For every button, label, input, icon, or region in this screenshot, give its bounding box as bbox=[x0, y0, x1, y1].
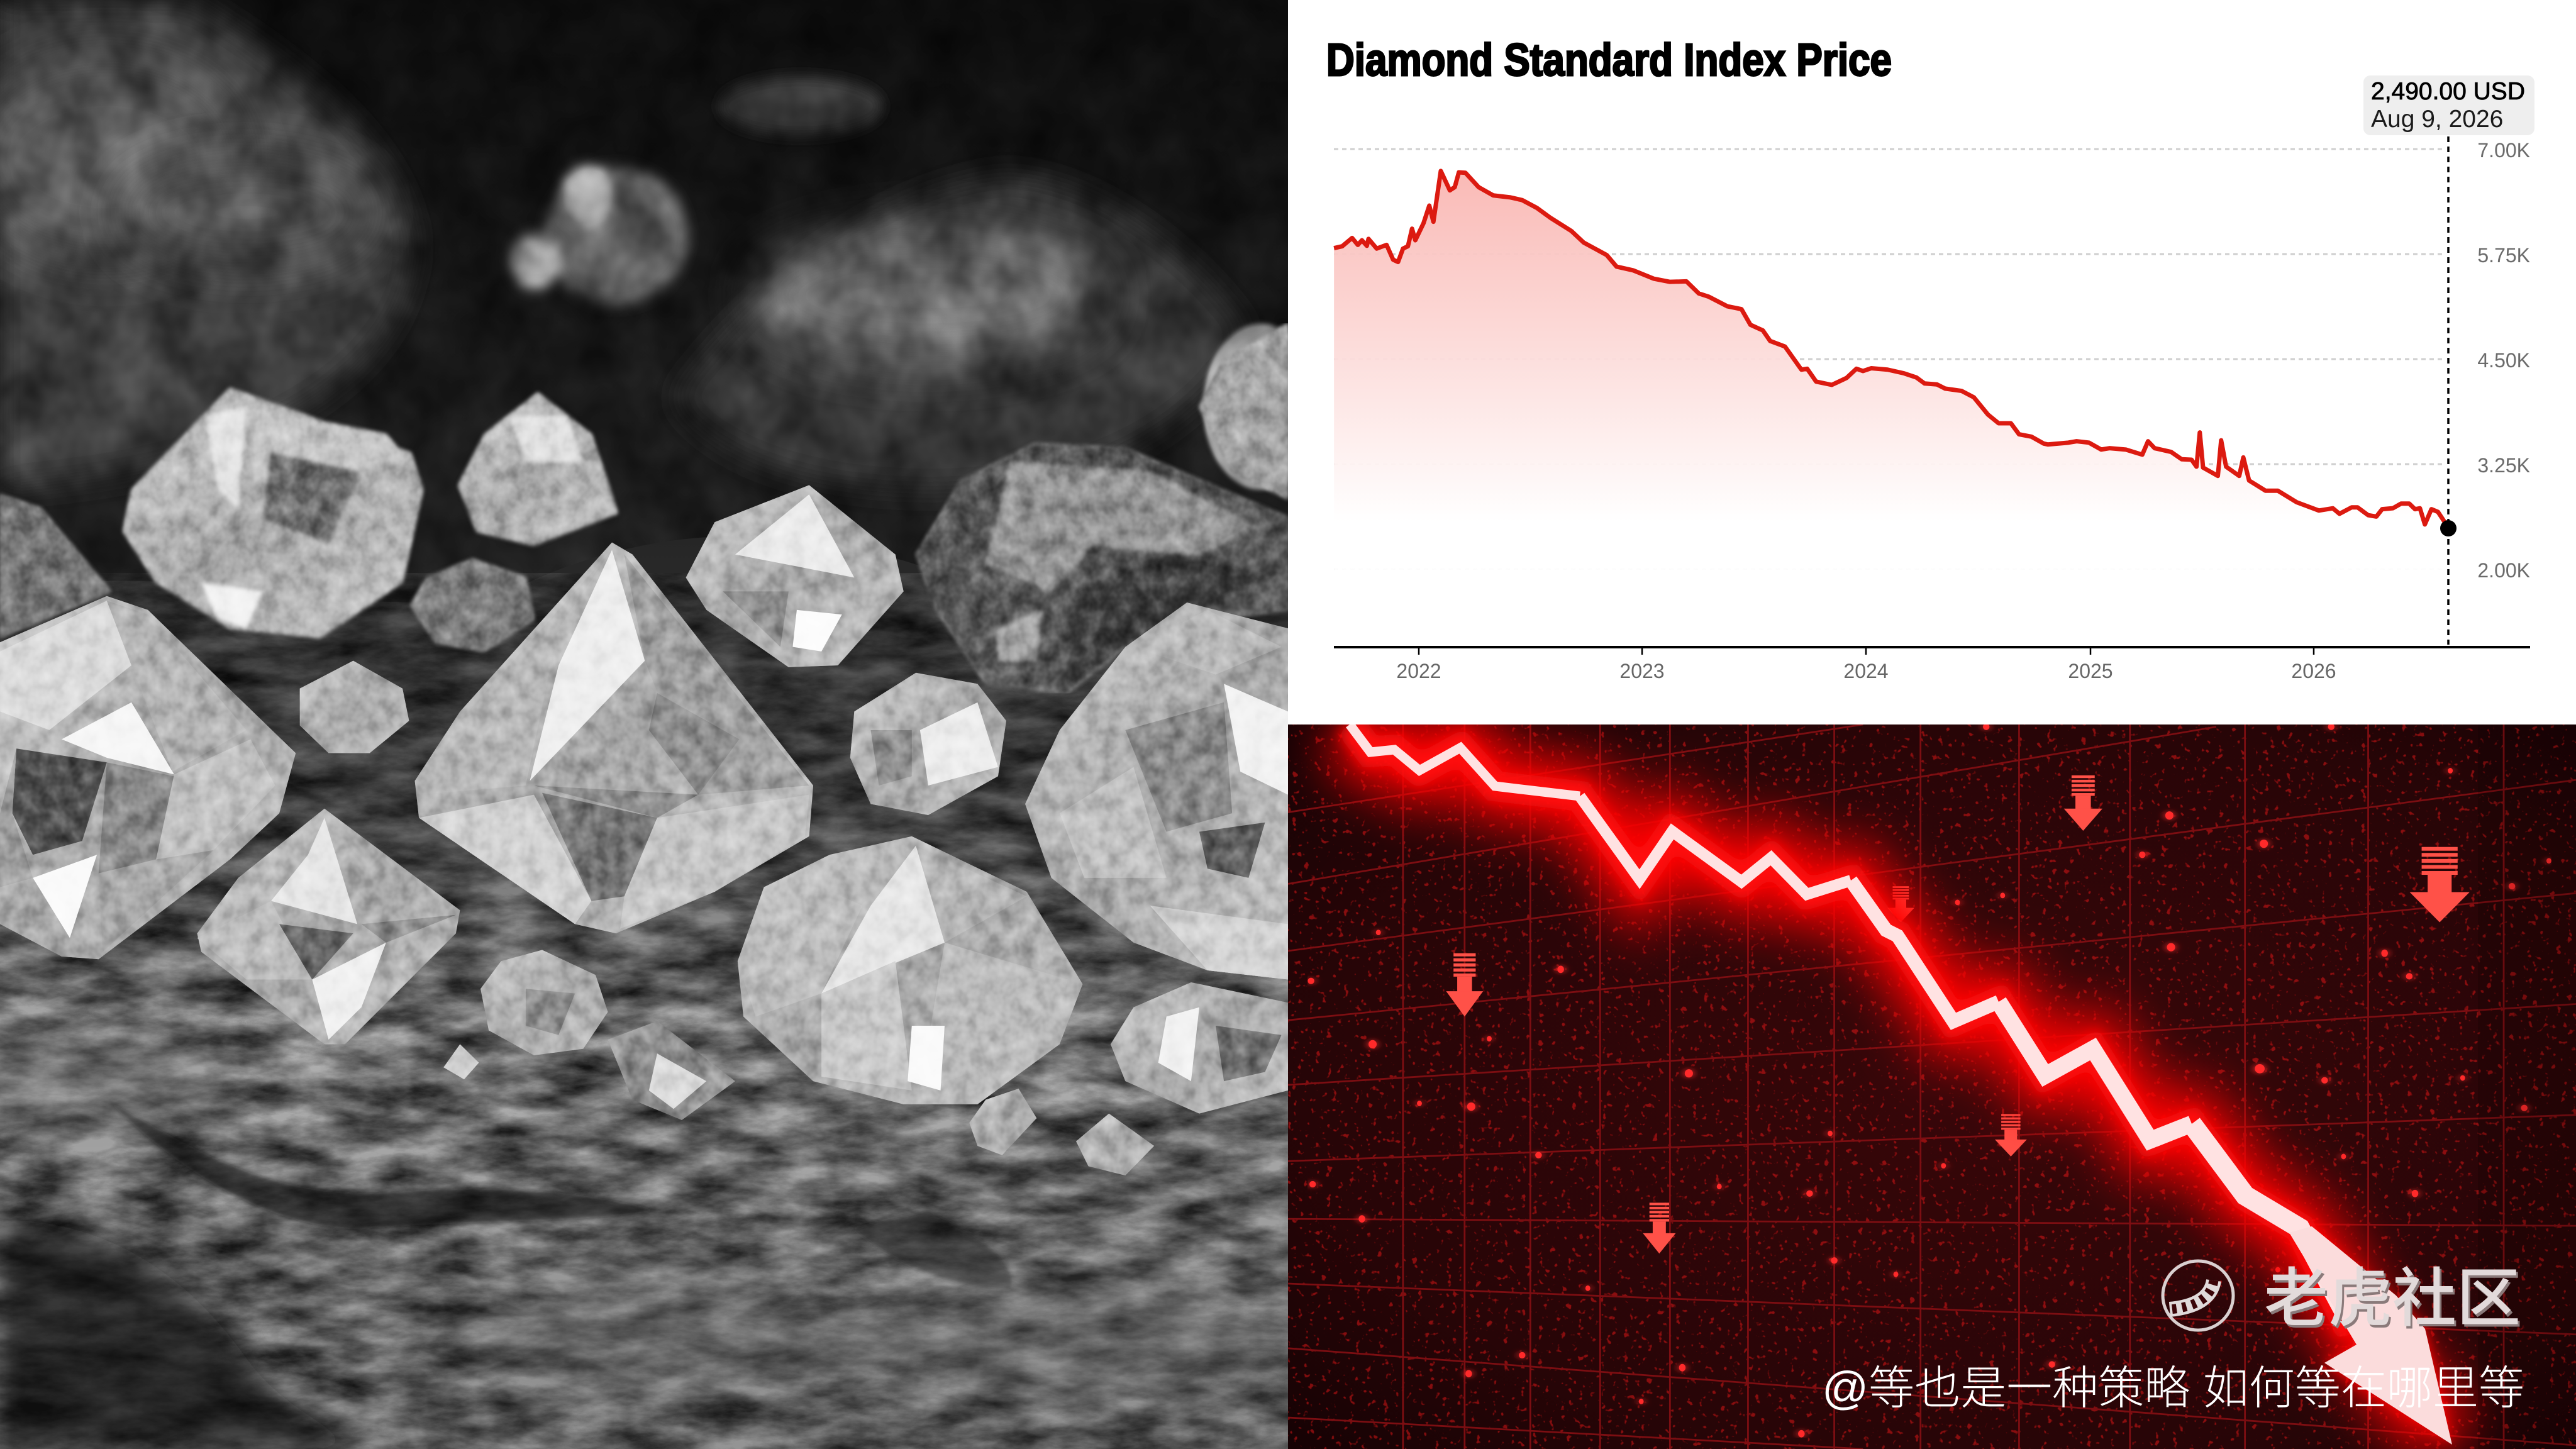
x axis year labels: 2023 bbox=[1619, 660, 1665, 682]
x axis year labels: 2024 bbox=[1843, 660, 1889, 682]
perspective grid bbox=[1288, 724, 2576, 1449]
falling glowing trend arrow bbox=[1350, 724, 2452, 1445]
horizontal gridlines bbox=[1334, 149, 2443, 569]
vignette edge bbox=[2478, 724, 2576, 1449]
crosshair marker bbox=[2447, 136, 2450, 645]
tooltip: 2,490.00 USD bbox=[2371, 78, 2525, 105]
tooltip bbox=[2363, 75, 2534, 135]
x axis year labels: 2026 bbox=[2291, 660, 2336, 682]
y axis labels: 5.75K bbox=[2477, 244, 2530, 267]
current price dot bbox=[2440, 520, 2457, 536]
panel: rough diamonds photo bbox=[0, 0, 1318, 1449]
diamond: lower centre-right bbox=[738, 836, 1082, 1104]
blurred background rocks bbox=[0, 0, 1318, 591]
x axis year labels: 2025 bbox=[2068, 660, 2113, 682]
tooltip: Aug 9, 2026 bbox=[2371, 106, 2503, 133]
foreground rock surface bbox=[0, 536, 1298, 1449]
speckled red data points bbox=[1288, 724, 2576, 1449]
chart title: Diamond Standard Index Price bbox=[1326, 35, 1892, 86]
y axis labels: 2.00K bbox=[2477, 559, 2530, 582]
y axis labels: 3.25K bbox=[2477, 454, 2530, 477]
watermark text: 老虎社区 bbox=[2264, 1247, 2521, 1340]
diamond: right large bbox=[1025, 602, 1288, 980]
y axis labels: 7.00K bbox=[2477, 139, 2530, 162]
diamond: centre pyramid bbox=[415, 543, 813, 933]
y axis labels bbox=[2477, 139, 2530, 582]
price area and line bbox=[1334, 171, 2449, 647]
small diamonds bbox=[300, 661, 1288, 1175]
crystal diamonds bbox=[0, 485, 1288, 1175]
author handle text: @等也是一种策略 如何等在哪里等 bbox=[1822, 1363, 2524, 1414]
glowing bright dots bbox=[1307, 724, 2551, 1438]
diamond: front small bbox=[197, 809, 460, 1044]
diamond: upper middle right bbox=[686, 485, 904, 667]
downward red arrows bbox=[1446, 775, 2470, 1253]
x axis with ticks bbox=[1334, 647, 2530, 655]
diamond: big left bbox=[0, 596, 296, 959]
dim rear diamonds bbox=[0, 323, 1288, 693]
panel: price chart bbox=[1288, 0, 2576, 724]
x axis year labels bbox=[1396, 660, 2336, 682]
y axis labels: 4.50K bbox=[2477, 349, 2530, 372]
watermark logo bbox=[2163, 1261, 2233, 1330]
panel: red market crash image bbox=[1288, 724, 2576, 1449]
diamond: round medium bbox=[850, 673, 1006, 815]
x axis year labels: 2022 bbox=[1396, 660, 1441, 682]
